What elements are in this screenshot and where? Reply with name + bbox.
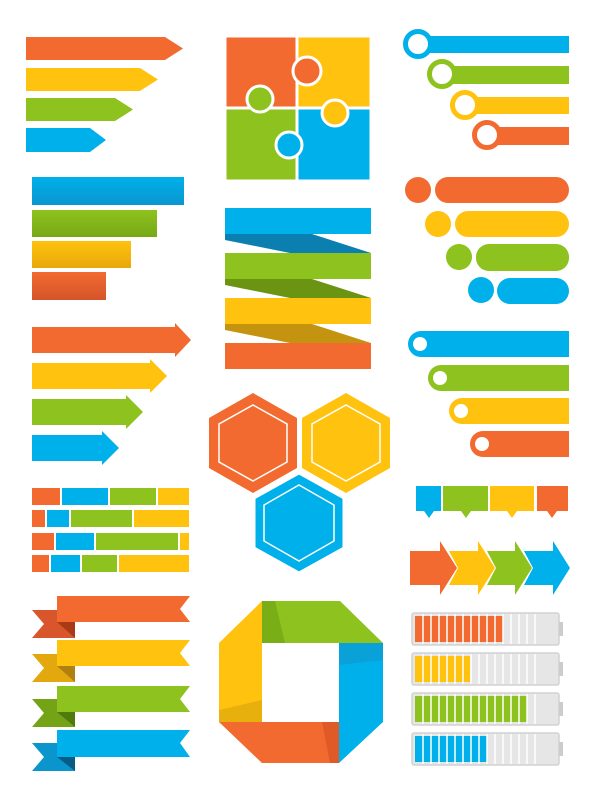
panel: tag pills <box>408 331 569 457</box>
panel: dot pills <box>405 177 569 304</box>
panel: gradient bar stack <box>32 177 184 300</box>
panel: block arrows <box>32 323 191 465</box>
panel: zigzag ribbon <box>225 208 371 369</box>
panel: callout tabs <box>416 486 568 518</box>
panel: brick rows <box>32 488 189 572</box>
panel: puzzle <box>225 36 371 181</box>
panel: chevron arrows <box>410 541 570 595</box>
panel: octagon ring <box>219 601 383 763</box>
panel: battery bars <box>412 613 563 765</box>
panel: hexagons <box>209 393 390 573</box>
panel: ring bars <box>406 32 569 148</box>
panel: ribbon banners <box>32 596 190 771</box>
panel: pentagon arrow bars <box>26 37 183 152</box>
